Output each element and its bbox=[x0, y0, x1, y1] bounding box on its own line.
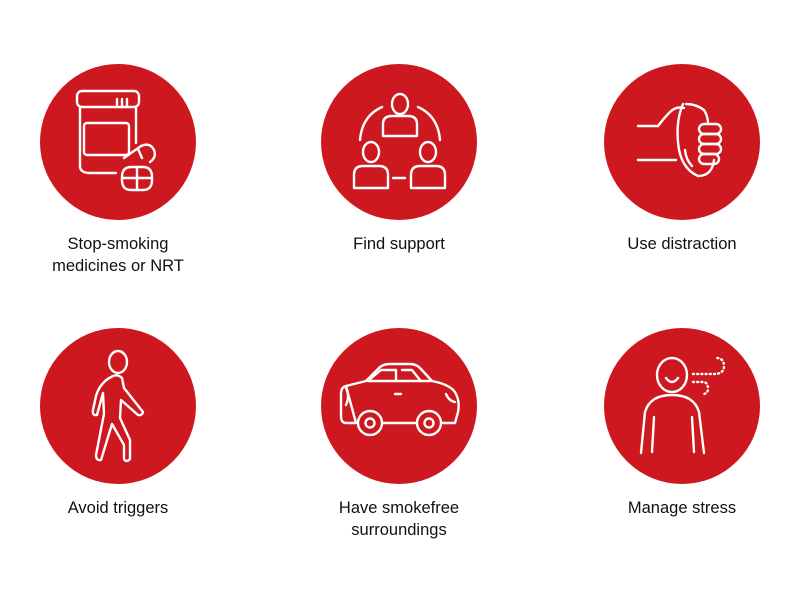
icon: walking person bbox=[40, 328, 196, 484]
icon: medicines bbox=[40, 64, 196, 220]
label: smokefree: Have smokefree bbox=[339, 499, 459, 517]
label: smokefree bbox=[339, 499, 459, 539]
icon: fist distraction bbox=[604, 64, 760, 220]
label: smokefree: surroundings bbox=[351, 521, 447, 539]
icon: support group bbox=[321, 64, 477, 220]
icon: stress breathing bbox=[604, 328, 760, 484]
label: stress: Manage stress bbox=[628, 499, 736, 517]
label: medicines: Stop-smoking bbox=[68, 235, 168, 253]
label: distraction: Use distraction bbox=[627, 235, 737, 253]
label: medicines bbox=[52, 235, 184, 275]
icon: car bbox=[321, 328, 477, 484]
label: triggers: Avoid triggers bbox=[68, 499, 168, 517]
label: medicines: medicines or NRT bbox=[52, 257, 184, 275]
label: support: Find support bbox=[353, 235, 445, 253]
